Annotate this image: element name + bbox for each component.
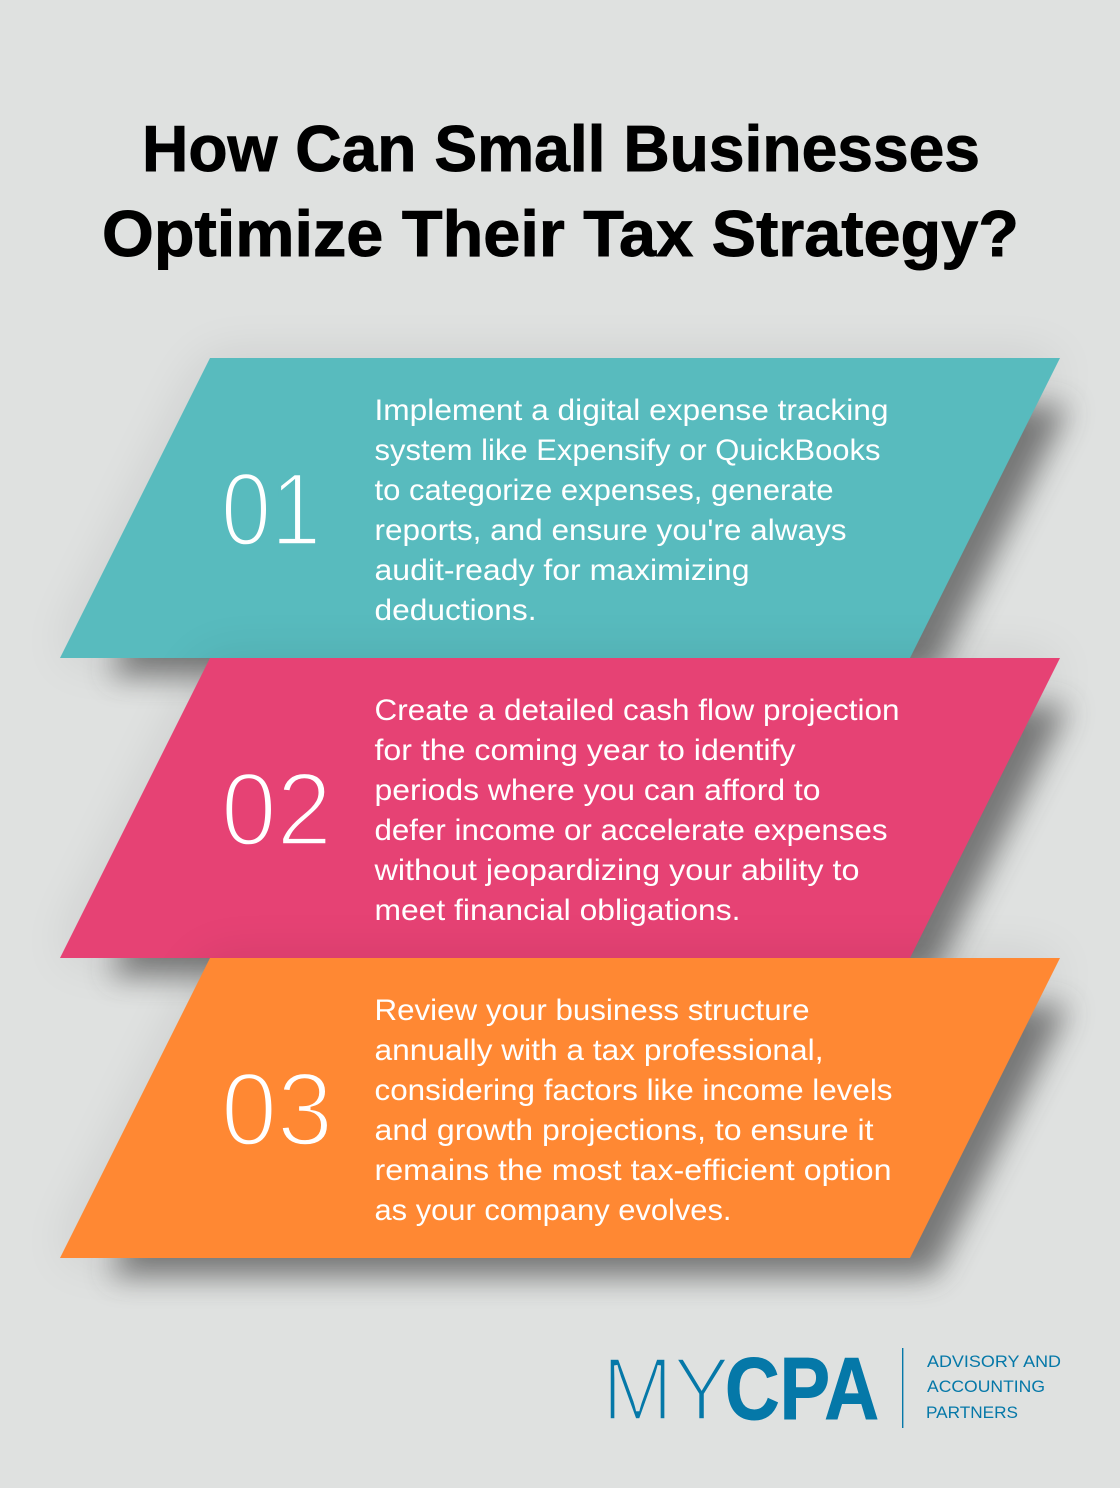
- title: [102, 112, 1019, 270]
- text block 3: annually with a tax professional,: [374, 1034, 824, 1067]
- text block 3: and growth projections, to ensure it: [374, 1114, 874, 1147]
- text block 1: audit-ready for maximizing: [374, 554, 750, 587]
- text block 1: to categorize expenses, generate: [374, 474, 834, 507]
- logo tagline: ACCOUNTING: [927, 1377, 1045, 1396]
- logo: MYCPA: [602, 1339, 1061, 1440]
- number 01: 01: [221, 452, 321, 568]
- text block 1: deductions.: [374, 594, 536, 627]
- title: Optimize Their Tax Strategy?: [102, 197, 1019, 270]
- panel 2: cash flow projection: [60, 658, 1060, 958]
- text block 3: Review your business structure: [374, 994, 810, 1027]
- text block 2: for the coming year to identify: [374, 734, 796, 767]
- logo tagline: ADVISORY AND: [927, 1352, 1061, 1371]
- number 02: 02: [221, 752, 332, 868]
- text block 3: remains the most tax-efficient option: [374, 1154, 892, 1187]
- text block 2: Create a detailed cash flow projection: [374, 694, 900, 727]
- panel 1: digital expense tracking: [60, 358, 1060, 658]
- text block 2: [373, 694, 899, 927]
- logo wordmark MY: MY: [602, 1340, 730, 1440]
- number 03: 03: [221, 1052, 333, 1168]
- text block 3: [374, 994, 892, 1227]
- text block 3: as your company evolves.: [374, 1194, 732, 1227]
- text block 1: reports, and ensure you're always: [374, 514, 846, 547]
- text block 2: defer income or accelerate expenses: [374, 814, 888, 847]
- text block 2: without jeopardizing your ability to: [373, 854, 860, 887]
- panel 3: business structure review: [60, 958, 1060, 1258]
- text block 1: system like Expensify or QuickBooks: [374, 434, 880, 467]
- logo tagline: [926, 1352, 1061, 1422]
- text block 2: meet financial obligations.: [374, 894, 740, 927]
- title: How Can Small Businesses: [142, 112, 980, 185]
- text block 2: periods where you can afford to: [374, 774, 820, 807]
- logo tagline: PARTNERS: [926, 1403, 1018, 1422]
- text block 1: [374, 394, 888, 627]
- text block 3: considering factors like income levels: [374, 1074, 892, 1107]
- text block 1: Implement a digital expense tracking: [374, 394, 888, 427]
- logo wordmark CPA: CPA: [725, 1339, 879, 1438]
